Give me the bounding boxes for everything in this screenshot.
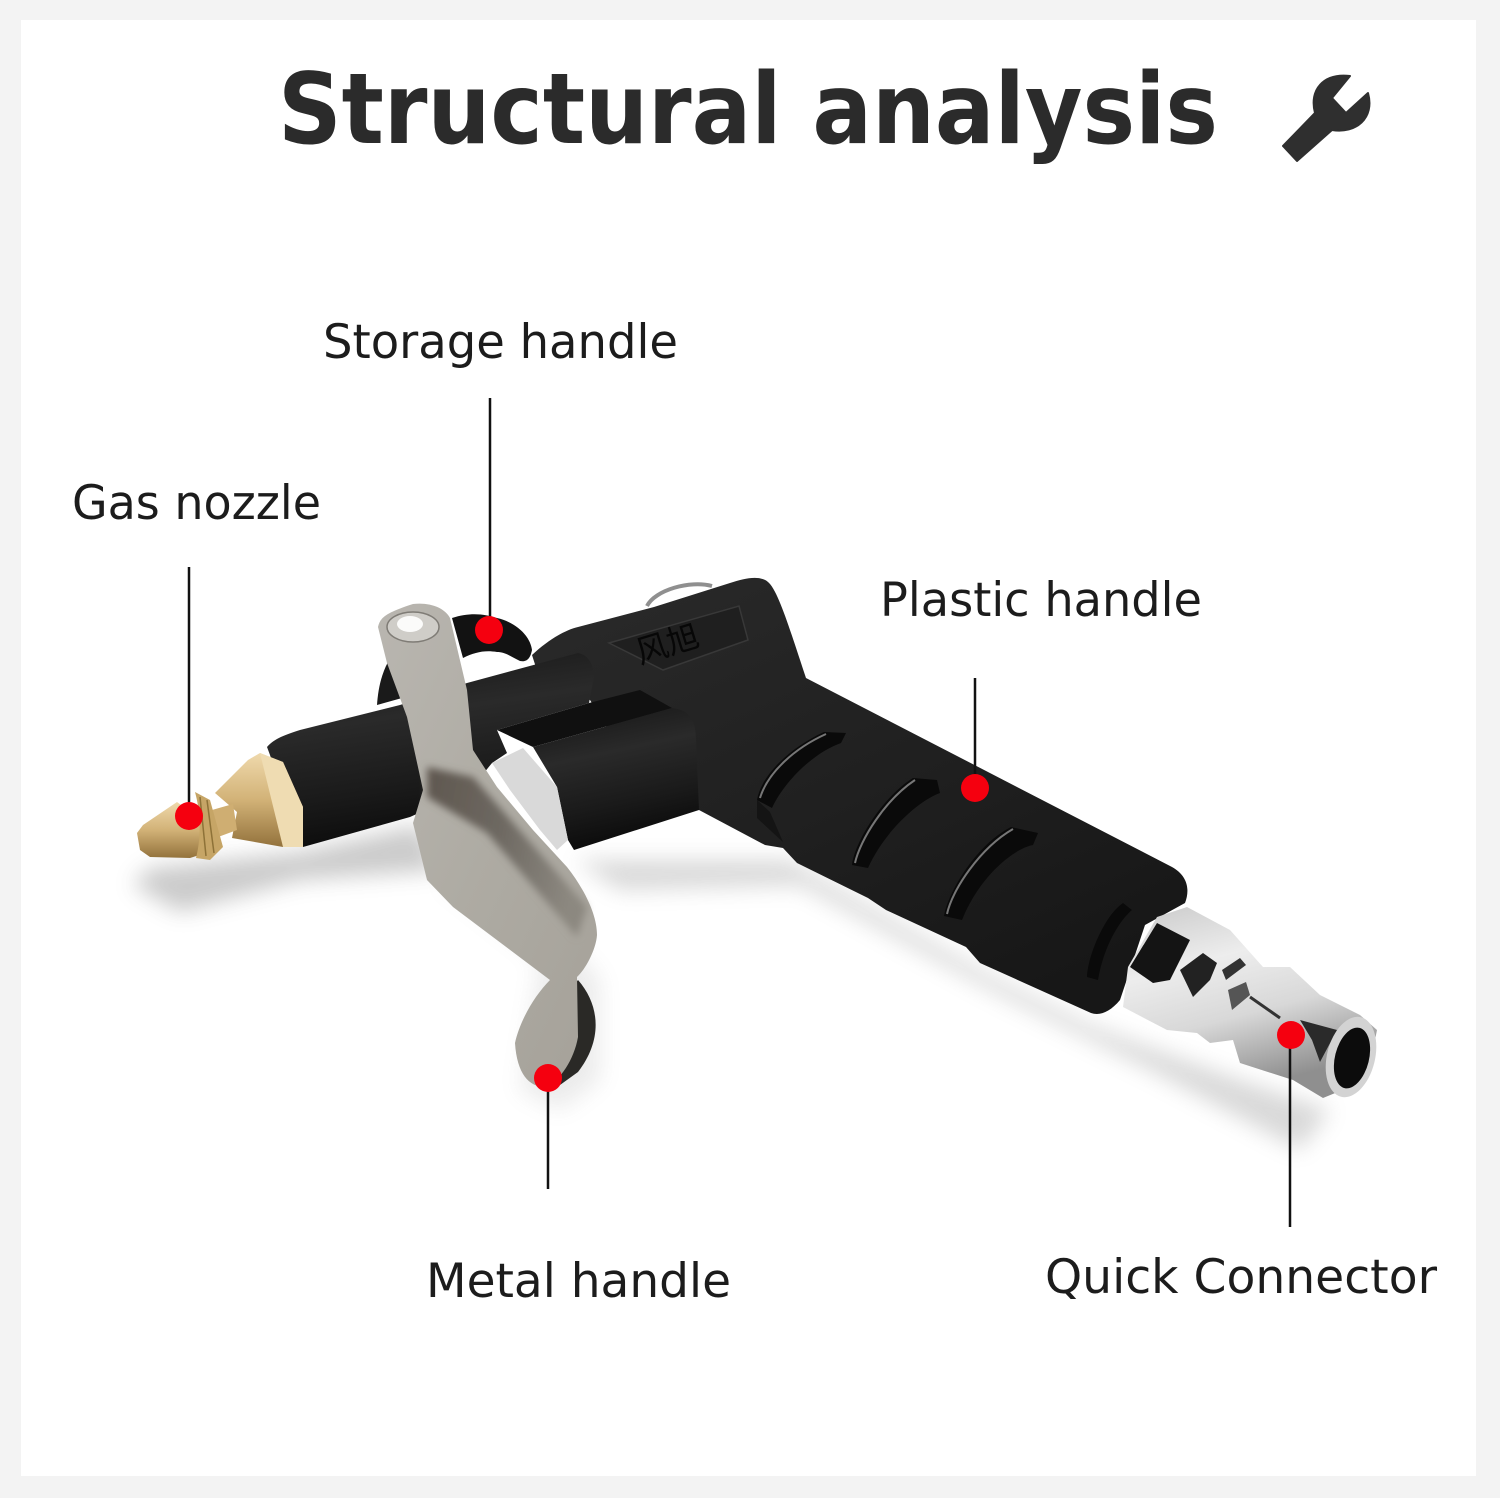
icon: wrench — [1283, 76, 1369, 161]
logo mark: 风旭 — [632, 618, 703, 671]
logo plate — [609, 606, 748, 670]
callout: plastic handle: Plastic handle — [880, 573, 1202, 628]
air blow gun illustration — [133, 578, 1384, 1150]
lower barrel — [533, 708, 699, 850]
callout: plastic handle — [880, 573, 1202, 802]
metal handle — [378, 604, 597, 1087]
storage hook — [452, 614, 532, 661]
callout: storage handle: Storage handle — [323, 315, 678, 370]
shaded band — [427, 767, 587, 937]
callout: storage handle — [323, 315, 678, 644]
upper barrel — [267, 653, 594, 847]
brass gas nozzle — [137, 753, 303, 860]
title: Structural analysis — [278, 53, 1218, 167]
grip slots — [757, 732, 846, 808]
plastic body and handle — [532, 578, 1187, 1014]
ground shadows — [133, 825, 1330, 1150]
callout: gas nozzle: Gas nozzle — [72, 476, 321, 531]
callout: metal handle — [426, 1064, 731, 1309]
callout: quick connector — [1045, 1021, 1438, 1305]
rivet — [387, 612, 439, 642]
ring behind body — [647, 584, 712, 606]
hex nut — [492, 748, 568, 850]
quick connector — [1123, 907, 1384, 1103]
gap between barrels — [497, 690, 672, 747]
callout: metal handle: Metal handle — [426, 1254, 731, 1309]
callout: gas nozzle — [72, 476, 321, 830]
callout: quick connector: Quick Connector — [1045, 1250, 1438, 1305]
